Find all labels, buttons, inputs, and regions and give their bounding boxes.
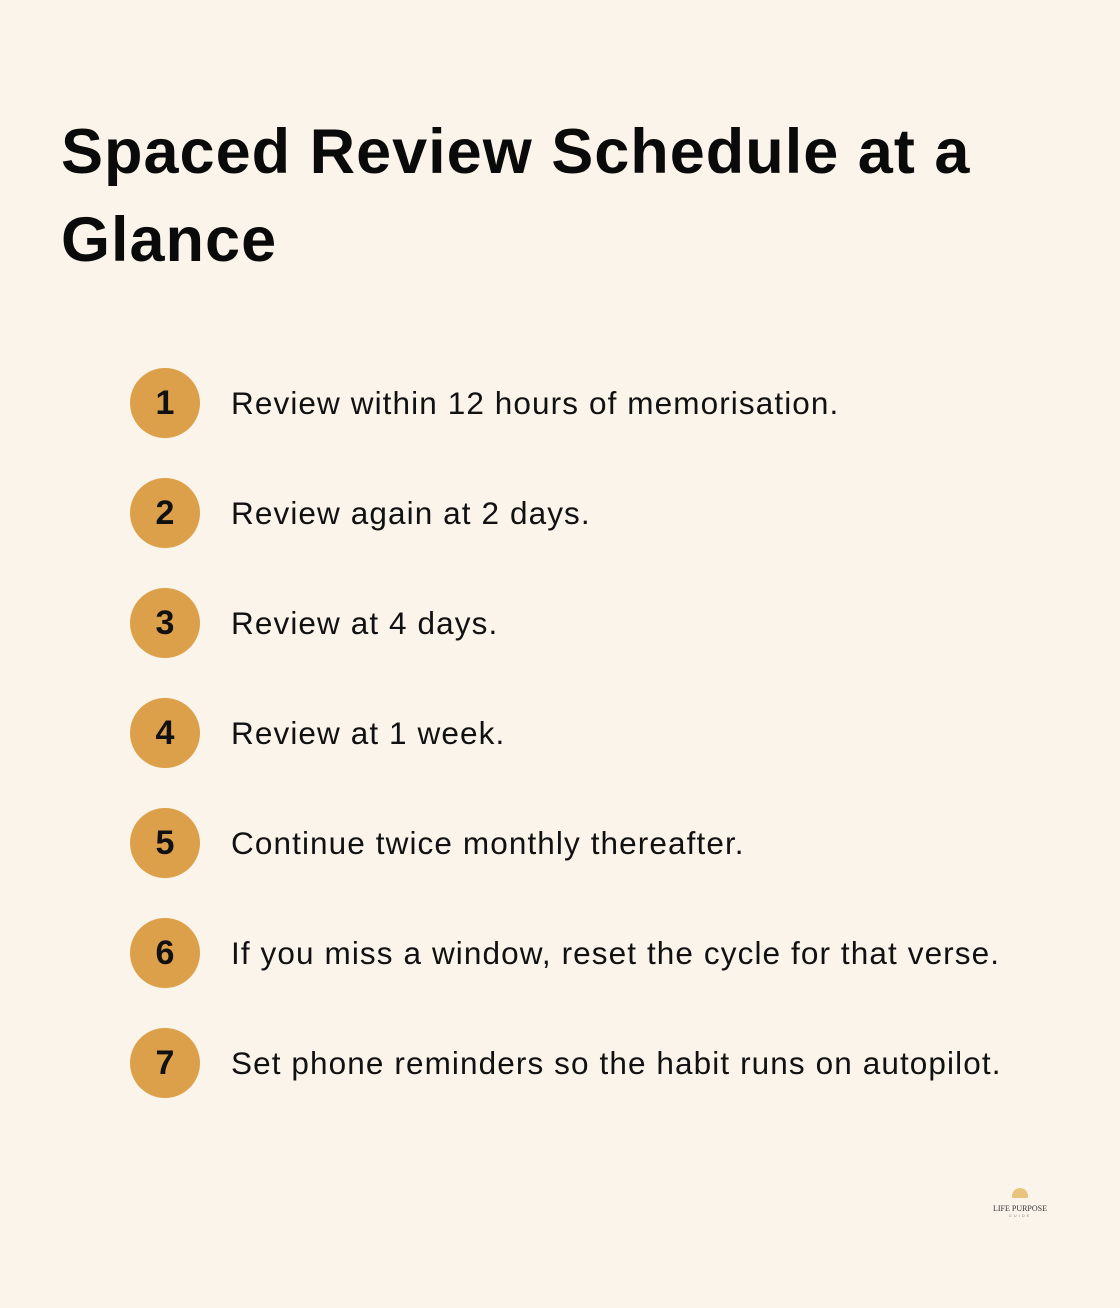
icon: number 7: [130, 1028, 200, 1098]
icon: number 6: 6: [156, 934, 174, 972]
title: Spaced Review Schedule at a Glance: [61, 117, 970, 275]
logo: LIFE PURPOSE: [993, 1204, 1047, 1213]
icon: number 2: 2: [156, 494, 174, 532]
item 3: [130, 588, 498, 658]
icon: number 4: [130, 698, 200, 768]
logo: GUIDE: [1009, 1213, 1031, 1218]
text 7: Set phone reminders so the habit runs on autopilot.: [231, 1045, 1002, 1081]
text 2: Review again at 2 days.: [231, 495, 591, 531]
icon: number 4: 4: [156, 714, 174, 752]
item 4: [130, 698, 505, 768]
icon: number 5: 5: [156, 824, 174, 862]
item 1: [130, 368, 839, 438]
icon: number 3: [130, 588, 200, 658]
icon: number 5: [130, 808, 200, 878]
icon: number 3: 3: [156, 604, 174, 642]
text 3: Review at 4 days.: [231, 605, 498, 641]
text 4: Review at 1 week.: [231, 715, 505, 751]
item 6: [130, 918, 1000, 988]
icon: number 1: [130, 368, 200, 438]
icon: number 1: 1: [156, 384, 174, 422]
item 7: [130, 1028, 1002, 1098]
item 5: [130, 808, 745, 878]
text 6: If you miss a window, reset the cycle for that verse.: [231, 935, 1000, 971]
item 2: [130, 478, 591, 548]
icon: number 7: 7: [156, 1044, 174, 1082]
text 5: Continue twice monthly thereafter.: [231, 825, 745, 861]
text 1: Review within 12 hours of memorisation.: [231, 385, 839, 421]
icon: number 2: [130, 478, 200, 548]
icon: number 6: [130, 918, 200, 988]
logo: [993, 1188, 1047, 1218]
